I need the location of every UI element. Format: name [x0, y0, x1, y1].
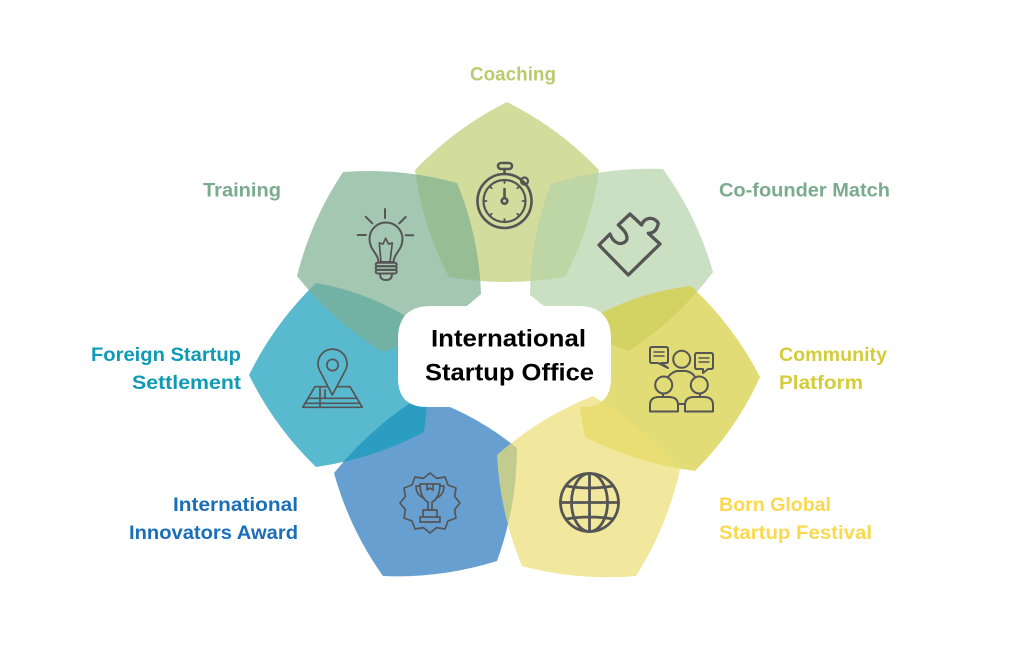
petal: International Innovators Award	[334, 396, 517, 576]
center title: International	[431, 326, 586, 352]
label: Co-founder Match: Co-founder Match	[719, 180, 890, 202]
label: Coaching: Coaching	[470, 64, 556, 86]
label: Foreign Startup Settlement	[91, 345, 242, 394]
petal: Foreign Startup Settlement	[249, 283, 428, 467]
label: Community Platform: Platform	[779, 373, 863, 394]
label: Training: Training	[203, 180, 281, 202]
icon: trophy badge	[400, 473, 460, 533]
label: Community Platform	[779, 345, 887, 394]
label: International Innovators Award	[129, 495, 298, 544]
petal: Co-founder Match	[530, 169, 713, 351]
center panel background	[398, 306, 611, 407]
label: Born Global Startup Festival	[719, 495, 872, 544]
label: Born Global Startup Festival: Born Global	[719, 495, 831, 516]
petal: Born Global Startup Festival	[497, 396, 680, 577]
icon: lightbulb	[358, 209, 413, 280]
center title	[425, 326, 594, 386]
label: International Innovators Award: International	[173, 495, 298, 516]
label: Foreign Startup Settlement: Settlement	[132, 373, 242, 394]
label: Community Platform: Community	[779, 345, 887, 366]
label: Born Global Startup Festival: Startup Festival	[719, 523, 872, 544]
center title: Startup Office	[425, 360, 594, 386]
petal: Community Platform	[576, 286, 760, 471]
icon: puzzle piece	[599, 214, 660, 275]
label: International Innovators Award: Innovators Award	[129, 523, 298, 544]
icon: globe	[560, 474, 618, 532]
petal: Coaching	[415, 102, 599, 282]
icon: stopwatch	[478, 163, 532, 228]
label: Foreign Startup Settlement: Foreign Startup	[91, 345, 241, 366]
icon: map pin	[303, 349, 362, 407]
petal: Training	[297, 171, 481, 352]
icon: community people	[650, 347, 713, 412]
